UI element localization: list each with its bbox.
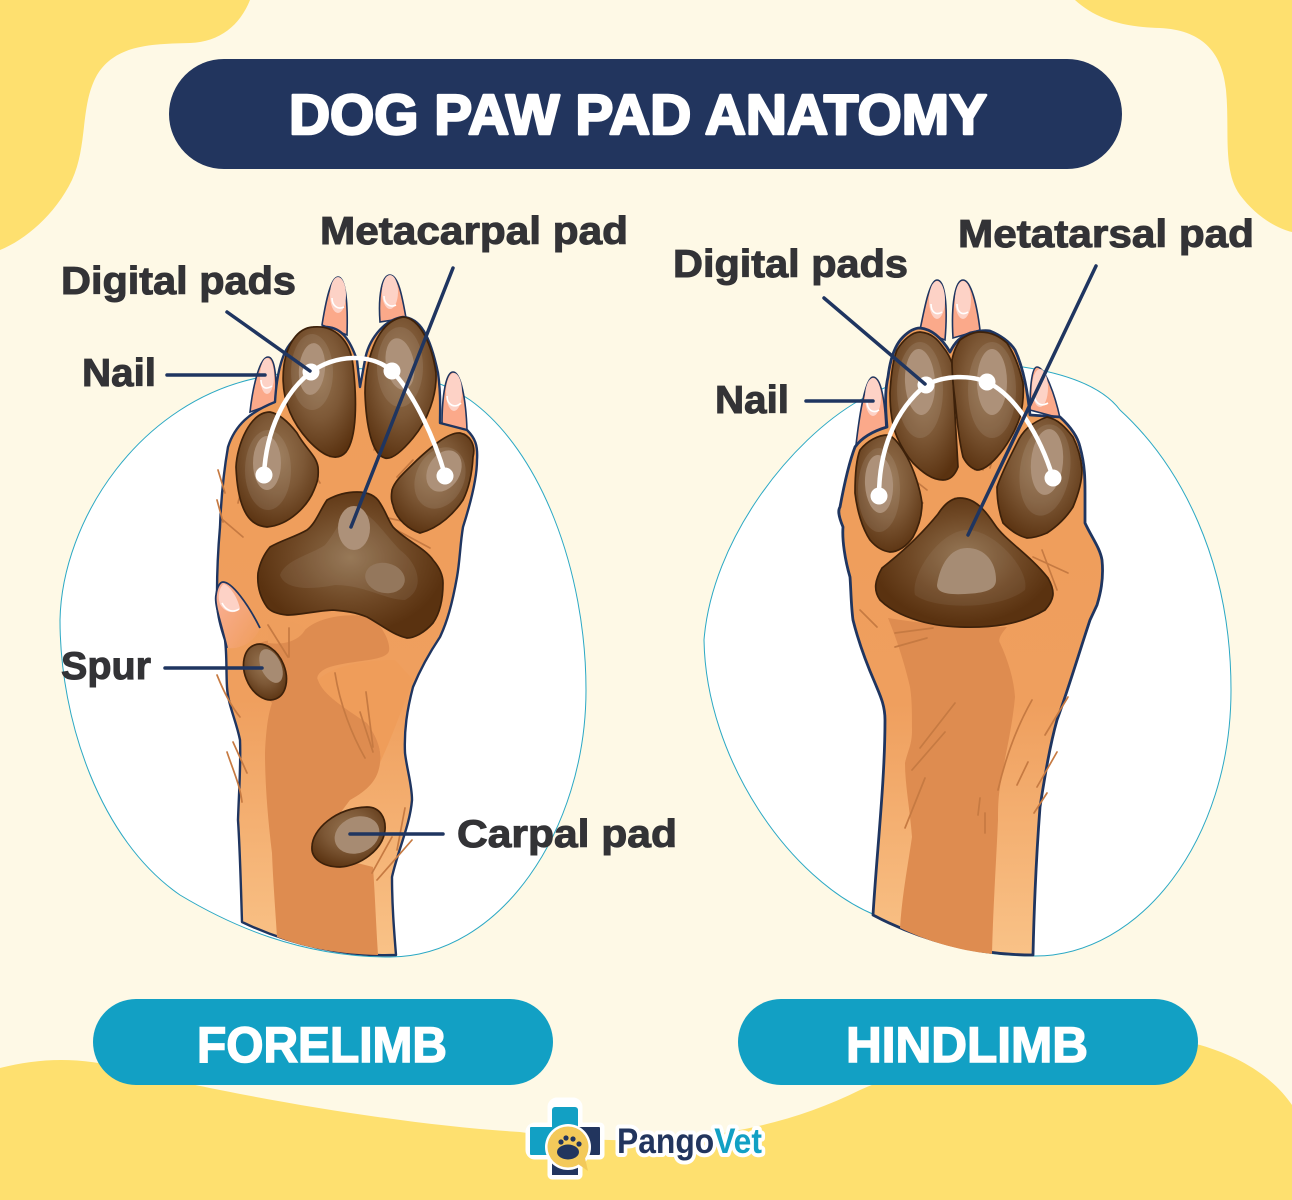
logo wordmark: PangoVet: [617, 1122, 762, 1161]
paw and leg: hindlimb: [839, 328, 1103, 955]
white backdrop: hindlimb: [704, 365, 1231, 956]
digital pads: forelimb: [236, 317, 475, 533]
white backdrop: forelimb: [60, 368, 586, 957]
label: Carpal pad: Carpal pad: [457, 813, 677, 856]
panel: forelimb illustration: [60, 275, 586, 957]
logo: PangoVet: [530, 1102, 762, 1175]
bottom wave: [0, 1036, 1292, 1200]
title: DOG PAW PAD ANATOMY: [289, 83, 987, 147]
leader lines: forelimb: [165, 268, 453, 834]
paw and leg: forelimb: [217, 317, 477, 955]
forelimb pill: [93, 999, 553, 1085]
white arc: hindlimb digital pads: [870, 374, 1062, 504]
label: Nail forelimb: Nail: [82, 352, 156, 395]
leg shading: forelimb: [253, 615, 413, 955]
label: Digital pads hindlimb: Digital pads: [673, 243, 908, 286]
label: Spur: Spur: [61, 645, 151, 688]
panel: hindlimb illustration: [704, 280, 1231, 956]
digital pads: hindlimb: [855, 332, 1082, 552]
hindlimb pill: HINDLIMB: [846, 1017, 1088, 1073]
label: Digital pads forelimb: Digital pads: [61, 260, 296, 303]
leg shading: hindlimb: [888, 618, 1015, 954]
fur strokes: hindlimb: [860, 410, 1068, 833]
spur toe: forelimb: [216, 582, 260, 648]
corner blob: top right: [1075, 0, 1292, 232]
carpal pad: forelimb: [312, 807, 385, 867]
spur pad: forelimb: [236, 638, 294, 706]
leader lines: hindlimb: [806, 266, 1096, 535]
label: Metacarpal pad: Metacarpal pad: [320, 210, 628, 253]
metacarpal pad: forelimb: [258, 492, 443, 638]
label: Metatarsal pad: Metatarsal pad: [958, 213, 1254, 256]
label: Nail hindlimb: Nail: [715, 379, 789, 422]
forelimb pill: FORELIMB: [197, 1017, 447, 1073]
white arc: forelimb digital pads: [256, 358, 454, 484]
icon: cross with paw: [530, 1102, 600, 1175]
nails: hindlimb: [856, 280, 1060, 445]
title banner: [169, 59, 1122, 169]
nails: forelimb: [250, 275, 467, 430]
fur strokes: forelimb: [217, 428, 430, 880]
corner blob: top left: [0, 0, 250, 250]
hindlimb pill: [738, 999, 1198, 1085]
metatarsal pad: hindlimb: [876, 498, 1053, 627]
